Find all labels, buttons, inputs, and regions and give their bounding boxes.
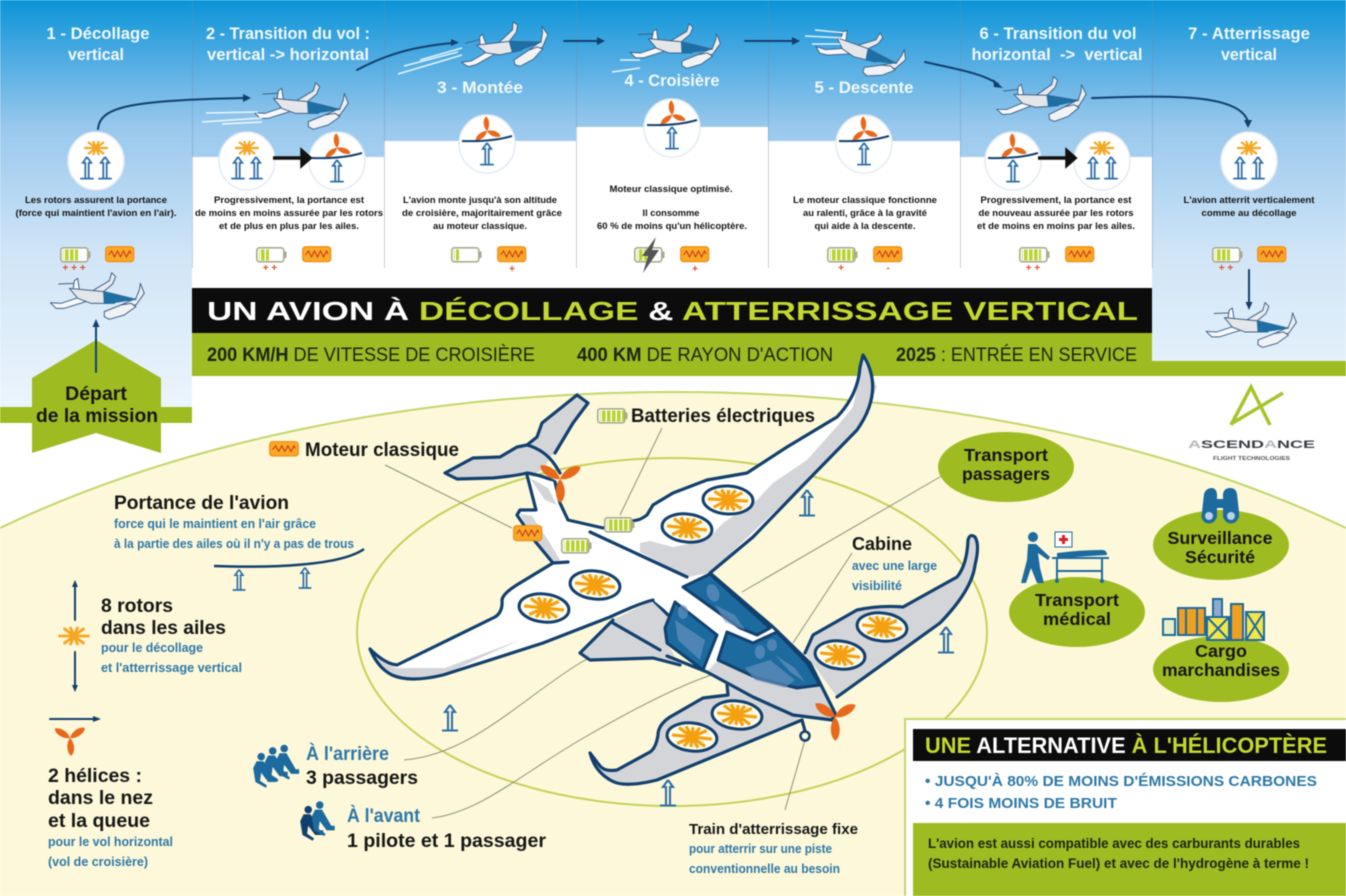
panel: step 4 (597, 24, 747, 275)
heading: step 1: 1 - Décollage (46, 24, 150, 43)
battery level step 7: + + (1219, 263, 1233, 274)
icon: rotors lift (1074, 132, 1130, 190)
text block: 2 hélices: 2 hélices : (48, 766, 142, 787)
description step 5 (793, 195, 937, 232)
use case: surveillance sécurité: Sécurité (1185, 547, 1255, 567)
use case: transport médical: Transport (1035, 590, 1119, 610)
description step 4: Il consomme (642, 208, 700, 219)
text block: à l'avant: À l'avant (347, 805, 421, 827)
mini plane step 3 (455, 15, 553, 78)
leader lines (385, 428, 957, 818)
icon: medical stretcher (1021, 532, 1109, 583)
stats bar: 200 KM/H DE VITESSE DE CROISIÈRE (207, 345, 535, 366)
engine step 1 (106, 247, 134, 262)
battery level step 1: + + + (62, 263, 86, 274)
panel: step 2 (195, 24, 383, 274)
text block: portance: à la partie des ailes où il n'y a pas de trous (114, 537, 354, 551)
icon: rotors lift (68, 132, 124, 190)
logo: Ascendance: FLIGHT TECHNOLOGIES (1213, 456, 1291, 462)
heading bar: UNE ALTERNATIVE À L'HÉLICOPTÈRE (925, 733, 1327, 758)
text block: à l'arrière: 3 passagers (306, 768, 418, 789)
icon: wing profile with lift (214, 549, 364, 590)
battery level step 2 (257, 248, 286, 274)
green strip left (0, 407, 192, 423)
passengers in cabin (675, 582, 805, 688)
panel: step 1 (16, 24, 176, 319)
body and main wings (370, 355, 877, 720)
description step 6: et de moins en moins par les ailes. (977, 221, 1135, 232)
text block: 2 hélices: dans le nez (48, 788, 153, 809)
text block: portance (114, 493, 354, 551)
icon: propeller lift (836, 115, 892, 173)
text block: portance: force qui le maintient en l'air grâce (114, 517, 316, 531)
label: cabine (852, 534, 937, 593)
mini plane step 2 (254, 83, 348, 129)
engine step 4: + (692, 264, 698, 275)
nose propeller (803, 684, 864, 745)
rotors in upper wing (661, 485, 754, 545)
text block: 2 hélices (48, 766, 173, 869)
use case: surveillance sécurité (1153, 510, 1289, 580)
mini plane step 1 (50, 273, 144, 319)
icon: front seats (300, 801, 335, 841)
engine step 2 (303, 247, 331, 262)
icon: rotor with vertical arrows (58, 580, 90, 692)
text block: 8 rotors: dans les ailes (101, 618, 226, 639)
black arrow (1038, 151, 1075, 165)
panel: step 3 (398, 15, 562, 275)
tail fin and stabilizer (445, 395, 588, 482)
label: batteries électriques: Batteries électriques (631, 406, 815, 427)
description step 2: et de plus en plus par les ailes. (219, 221, 359, 232)
engine step 7 (1258, 247, 1286, 262)
inner ellipse (357, 458, 987, 806)
heading: step 6: 6 - Transition du vol (980, 24, 1136, 43)
landing gear (800, 720, 810, 740)
battery with lightning (635, 237, 664, 273)
start badge: Départ de la mission (32, 340, 161, 453)
start badge: Départ de la mission: Départ (65, 383, 127, 405)
lift arrows around plane (442, 490, 954, 806)
icon: propeller with horizontal arrow (46, 713, 101, 759)
use case: transport passagers: passagers (962, 464, 1050, 484)
mini plane step 5 (812, 19, 910, 84)
text block: à l'arrière (306, 743, 418, 789)
heading: step 2 (206, 24, 370, 64)
description step 4: Moteur classique optimisé. (610, 184, 732, 195)
description step 1: (force qui maintient l'avion en l'air). (16, 208, 176, 219)
tail propeller (528, 446, 589, 507)
text block: 8 rotors: 8 rotors (101, 596, 173, 617)
icon: battery on plane 2 (605, 518, 634, 532)
panel: step 7 (1184, 24, 1315, 347)
heading: step 5: 5 - Descente (814, 78, 914, 97)
icon: engine on plane (514, 526, 542, 541)
battery level step 5 (828, 248, 858, 274)
green note: (Sustainable Aviation Fuel) et avec de l'hydrogène à terme ! (928, 856, 1309, 871)
description step 7: comme au décollage (1202, 208, 1296, 219)
icon: propeller lift (644, 99, 700, 157)
heading: step 4: 4 - Croisière (624, 71, 720, 90)
logo: Ascendance: A SCEND A NCE (1188, 439, 1315, 451)
rotors in left wing (518, 568, 621, 625)
stats bar: 2025 : ENTRÉE EN SERVICE (896, 345, 1137, 366)
bullet list (925, 773, 1317, 812)
text block: 2 hélices: et la queue (48, 811, 150, 832)
body shading (372, 360, 877, 720)
battery level step 6 (1020, 248, 1050, 274)
description step 3: de croisière, majoritairement grâce (402, 208, 562, 219)
description step 3: au moteur classique. (433, 221, 527, 232)
description step 3 (402, 195, 562, 232)
start badge: Départ de la mission: de la mission (36, 405, 158, 427)
background: sky columns (0, 0, 1346, 407)
icon: rotors lift (1221, 132, 1277, 190)
icon: propeller lift (309, 132, 365, 190)
text block: 8 rotors: et l'atterrissage vertical (101, 661, 242, 675)
description step 4: 60 % de moins qu'un hélicoptère. (597, 221, 747, 232)
text block: train d'atterrissage: conventionnelle au besoin (689, 862, 840, 876)
engine step 3: + (509, 264, 515, 275)
use case: transport passagers: Transport (964, 445, 1048, 465)
icon: cargo boxes (1163, 599, 1264, 640)
label: cabine: visibilité (852, 579, 902, 593)
description step 5: qui aide à la descente. (814, 221, 916, 232)
engine step 5 (874, 247, 902, 274)
text block: à l'avant: 1 pilote et 1 passager (347, 831, 547, 852)
title banner: UN AVION À DÉCOLLAGE & ATTERRISSAGE VERTICAL (207, 296, 1138, 326)
stats bar: 400 KM DE RAYON D'ACTION (577, 345, 833, 366)
battery level step 3 (452, 248, 482, 262)
description step 7 (1184, 195, 1315, 219)
battery level step 6: + + (1026, 263, 1040, 274)
text block: 2 hélices: pour le vol horizontal (48, 835, 173, 849)
engine step 3 (498, 247, 526, 275)
heading: step 2: 2 - Transition du vol : (206, 24, 370, 43)
battery level step 5: + (838, 263, 844, 274)
icon: rear seats (253, 745, 299, 788)
speed lines step 2 (202, 112, 262, 124)
panel: step 6 (972, 24, 1142, 274)
heading: step 7: 7 - Atterrissage (1188, 24, 1310, 43)
description step 5: Le moteur classique fonctionne (793, 195, 937, 206)
flight path arrows (92, 37, 1252, 372)
description step 5: au ralenti, grâce à la gravité (803, 208, 927, 219)
icon: battery on plane 1 (562, 539, 592, 553)
engine step 4 (681, 247, 709, 275)
text block: 8 rotors: pour le décollage (101, 641, 203, 655)
text block: train d'atterrissage: pour atterrir sur une piste (689, 842, 832, 856)
text block: à l'avant (347, 805, 547, 852)
icon: propeller lift (459, 115, 515, 173)
description step 6: Progressivement, la portance est (980, 195, 1132, 206)
icon: binoculars (1202, 488, 1239, 524)
text block: train d'atterrissage: Train d'atterrissage fixe (689, 821, 858, 838)
use case: transport médical (1009, 577, 1145, 647)
green note (913, 823, 1346, 896)
panel: alternative à l'hélicoptère (905, 719, 1346, 896)
speed lines step 3 (398, 48, 462, 74)
battery level step 1 (61, 248, 90, 274)
text block: train d'atterrissage (689, 821, 858, 876)
description step 4 (597, 184, 747, 232)
label: cabine: Cabine (852, 534, 912, 554)
description step 1: Les rotors assurent la portance (25, 195, 167, 206)
mini plane step 6 (995, 74, 1088, 125)
use case: cargo marchandises: Cargo (1195, 641, 1247, 661)
speed lines step 5 (805, 30, 845, 44)
heading: step 2: vertical -> horizontal (207, 45, 369, 64)
plane illustration (370, 355, 978, 784)
label: moteur classique: Moteur classique (305, 440, 459, 461)
use case: transport passagers (938, 432, 1074, 502)
text block: 8 rotors (101, 596, 242, 675)
use case: transport médical: médical (1043, 609, 1111, 629)
near wing (805, 536, 978, 697)
engine step 5: - (886, 263, 890, 274)
heading: step 1 (46, 24, 150, 64)
use case: cargo marchandises (1153, 636, 1289, 702)
use case: surveillance sécurité: Surveillance (1168, 528, 1273, 548)
text block: portance: Portance de l'avion (114, 493, 289, 514)
description step 6 (977, 195, 1135, 232)
description step 2 (195, 195, 383, 232)
use case: cargo marchandises: marchandises (1162, 660, 1280, 680)
body outline (370, 355, 873, 720)
rear strake (580, 600, 680, 665)
heading: step 3: 3 - Montée (437, 78, 523, 97)
text block: à l'arrière: À l'arrière (306, 743, 389, 765)
panel: step 5 (793, 19, 937, 274)
green strip right (1152, 361, 1346, 376)
description step 2: de moins en moins assurée par les rotors (195, 208, 383, 219)
logo: Ascendance (1188, 387, 1315, 462)
description step 1 (16, 195, 176, 219)
mini plane step 7 (1206, 303, 1296, 347)
heading: step 1: vertical (68, 45, 124, 64)
stats bar (192, 333, 1152, 376)
speed lines step 4 (612, 60, 640, 72)
black arrow (273, 151, 310, 165)
green note: L'avion est aussi compatible avec des carburants durables (928, 836, 1300, 851)
wing component icons on plane (514, 518, 634, 553)
bullet list: • JUSQU'À 80% DE MOINS D'ÉMISSIONS CARBONES (925, 773, 1317, 790)
description step 3: L'avion monte jusqu'à son altitude (403, 195, 557, 206)
heading: step 7 (1188, 24, 1310, 64)
battery level step 7 (1213, 248, 1242, 274)
description step 6: de nouveau assurée par les rotors (978, 208, 1134, 219)
bullet list: • 4 FOIS MOINS DE BRUIT (925, 795, 1117, 812)
mini plane step 4 (630, 24, 720, 68)
icon: rotors lift (219, 132, 275, 190)
background: large cream ellipse (0, 392, 1346, 896)
engine step 6 (1066, 247, 1094, 262)
heading: step 7: vertical (1221, 45, 1277, 64)
text block: 2 hélices: (vol de croisière) (48, 855, 148, 869)
heading: step 6: horizontal -> vertical (972, 45, 1142, 64)
description step 7: L'avion atterrit verticalement (1184, 195, 1315, 206)
battery level step 2: + + (263, 263, 277, 274)
description step 2: Progressivement, la portance est (214, 195, 365, 206)
label: cabine: avec une large (852, 559, 937, 573)
heading: step 6 (972, 24, 1142, 64)
lower wing (590, 685, 802, 784)
title banner (192, 288, 1152, 333)
cabin windows (665, 574, 820, 688)
icon: propeller lift (985, 132, 1041, 190)
